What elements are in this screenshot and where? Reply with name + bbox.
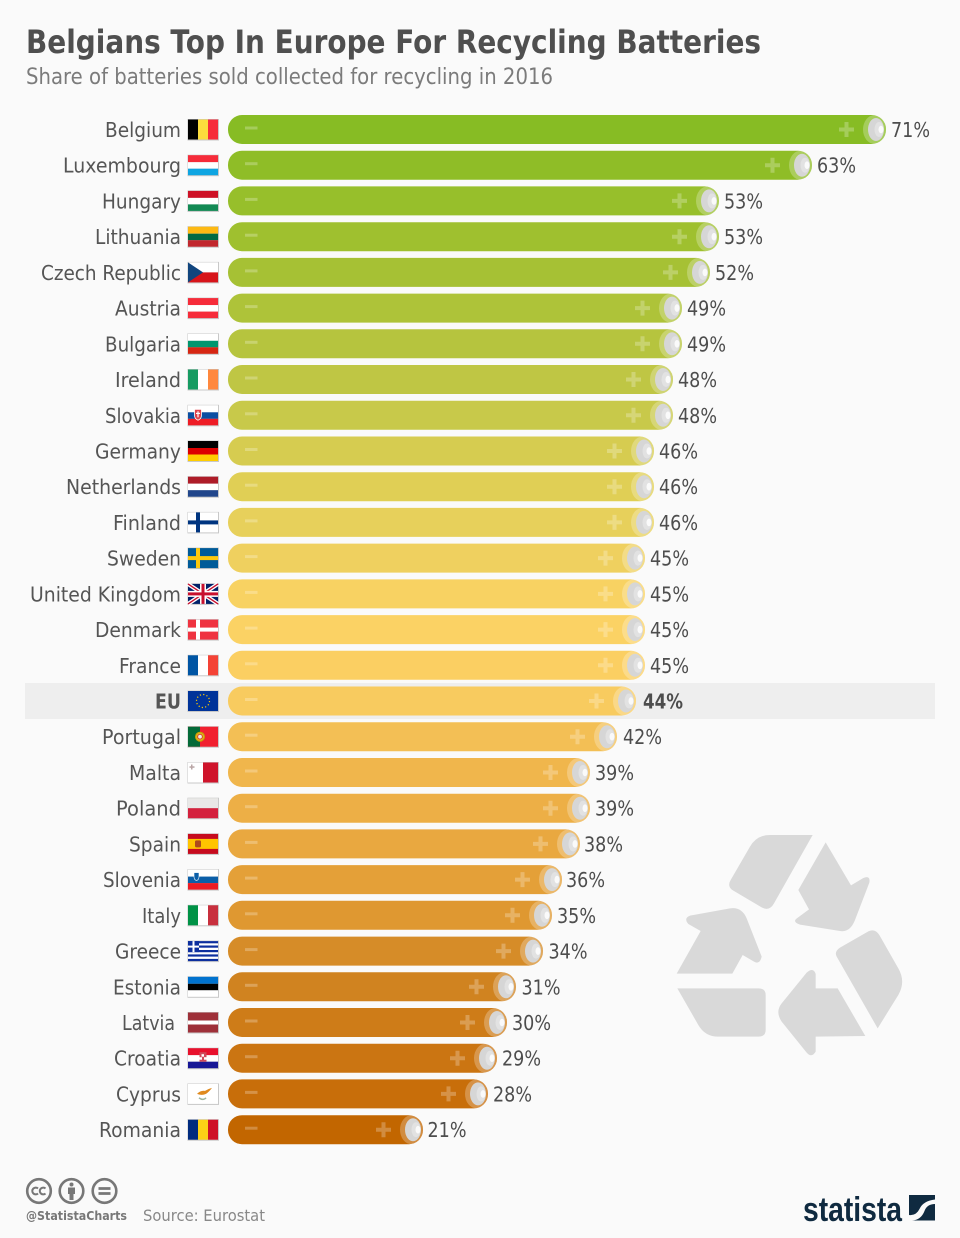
row: Ireland bbox=[115, 365, 717, 394]
flag: Belgium bbox=[188, 119, 219, 140]
row: Latvia: 30% bbox=[512, 1011, 551, 1035]
flag: Slovakia bbox=[188, 405, 219, 426]
statista wordmark: statista bbox=[803, 1191, 903, 1229]
subtitle: Share of batteries sold collected for recycling in 2016 bbox=[26, 65, 553, 90]
row: Croatia: 29% bbox=[502, 1047, 541, 1071]
row: Finland bbox=[113, 508, 698, 537]
flag: Germany bbox=[188, 440, 219, 462]
row: Netherlands bbox=[66, 472, 698, 501]
battery bar: Lithuania bbox=[228, 222, 719, 251]
row: Denmark: 45% bbox=[650, 618, 689, 642]
row: EU: 44% bbox=[643, 690, 683, 714]
row: Hungary: Hungary bbox=[102, 189, 181, 213]
row: Poland: Poland bbox=[116, 797, 181, 821]
row: Slovenia bbox=[103, 865, 605, 894]
battery bar: Netherlands bbox=[228, 472, 654, 501]
battery bar: United Kingdom bbox=[228, 579, 645, 608]
row: France bbox=[119, 651, 689, 680]
row: Romania: 21% bbox=[428, 1118, 466, 1142]
row: Malta: Malta bbox=[129, 761, 181, 785]
flag: Poland bbox=[188, 798, 219, 819]
row: Belgium bbox=[105, 115, 930, 144]
battery bar: Austria bbox=[228, 294, 682, 323]
row: Greece: Greece bbox=[115, 940, 181, 964]
row: Latvia: Latvia bbox=[122, 1011, 175, 1035]
row: Slovenia: 36% bbox=[566, 868, 605, 892]
flag: Czech Republic bbox=[188, 262, 219, 283]
row: Austria bbox=[115, 294, 726, 323]
row: Ireland: 48% bbox=[678, 368, 717, 392]
social handle: @StatistaCharts bbox=[26, 1208, 127, 1223]
row: Greece: 34% bbox=[548, 940, 588, 964]
flag: Latvia bbox=[188, 1012, 219, 1034]
flag: United Kingdom bbox=[188, 583, 219, 605]
battery bar: Greece bbox=[228, 937, 543, 966]
row: Slovakia: Slovakia bbox=[105, 404, 181, 428]
battery bar: Germany bbox=[228, 436, 654, 466]
row: Czech Republic: Czech Republic bbox=[41, 261, 181, 285]
row: Germany: 46% bbox=[659, 440, 698, 464]
battery bar: Malta bbox=[228, 758, 590, 787]
row: Hungary: 53% bbox=[724, 189, 763, 213]
row: Finland: Finland bbox=[113, 511, 181, 535]
battery bar: Italy bbox=[228, 901, 552, 930]
flag: Portugal bbox=[188, 726, 219, 748]
flag: Netherlands bbox=[188, 476, 219, 498]
battery bar: EU bbox=[228, 686, 636, 716]
row: EU: EU bbox=[155, 690, 181, 714]
flag: Sweden bbox=[188, 548, 219, 569]
row: Sweden bbox=[107, 544, 689, 573]
row: Estonia bbox=[113, 972, 560, 1001]
row: Netherlands: Netherlands bbox=[66, 475, 181, 499]
battery bar: Estonia bbox=[228, 972, 516, 1001]
row: Estonia: Estonia bbox=[113, 975, 181, 999]
row: Romania: Romania bbox=[99, 1118, 181, 1142]
row: Malta bbox=[129, 758, 634, 787]
row: Portugal: 42% bbox=[623, 725, 662, 749]
flag: Ireland bbox=[188, 369, 219, 390]
flag: Italy bbox=[188, 905, 219, 926]
title: Belgians Top In Europe For Recycling Batteries bbox=[26, 23, 761, 61]
battery bar: Spain bbox=[228, 829, 580, 858]
flag: Austria bbox=[188, 298, 219, 319]
row: Italy: 35% bbox=[557, 904, 596, 928]
flag: Romania bbox=[188, 1119, 219, 1141]
row: Ireland: Ireland bbox=[115, 368, 181, 392]
row: Poland bbox=[116, 794, 634, 823]
battery bar: Portugal bbox=[228, 722, 617, 751]
flag: France bbox=[188, 655, 219, 676]
battery bar: Hungary bbox=[228, 186, 719, 215]
row: Netherlands: 46% bbox=[659, 475, 698, 499]
battery bar: Poland bbox=[228, 794, 590, 823]
flag: Denmark bbox=[188, 619, 219, 641]
row: Portugal bbox=[102, 722, 662, 751]
row: Slovakia bbox=[105, 401, 717, 430]
row: Italy bbox=[142, 901, 596, 930]
battery bar: Finland bbox=[228, 508, 654, 537]
flag: Estonia bbox=[188, 976, 219, 998]
row: United Kingdom: 45% bbox=[650, 582, 689, 606]
icon: recycling symbol bbox=[677, 835, 902, 1055]
row: Lithuania: 53% bbox=[724, 225, 763, 249]
battery bar: Ireland bbox=[228, 365, 673, 394]
battery bar: Belgium bbox=[228, 115, 886, 144]
battery bar: Slovakia bbox=[228, 401, 673, 430]
row: Czech Republic: 52% bbox=[715, 261, 754, 285]
battery bar: Czech Republic bbox=[228, 258, 710, 287]
row: Cyprus bbox=[116, 1079, 532, 1108]
row: Lithuania bbox=[95, 222, 763, 251]
row: Austria: 49% bbox=[687, 297, 726, 321]
row: Croatia: Croatia bbox=[114, 1047, 181, 1071]
row: Bulgaria bbox=[105, 329, 726, 358]
row: Czech Republic bbox=[41, 258, 754, 287]
row: Spain: 38% bbox=[584, 832, 623, 856]
row: Lithuania: Lithuania bbox=[95, 225, 181, 249]
flag: Slovenia bbox=[188, 869, 219, 891]
battery bar: Denmark bbox=[228, 615, 645, 644]
row: Portugal: Portugal bbox=[102, 725, 181, 749]
flag: Finland bbox=[188, 512, 219, 533]
row: Romania bbox=[99, 1115, 466, 1144]
battery bar: Romania bbox=[228, 1115, 423, 1144]
row: Sweden: 45% bbox=[650, 547, 689, 571]
row: Sweden: Sweden bbox=[107, 547, 181, 571]
flag: Hungary bbox=[188, 190, 219, 212]
flag: Spain bbox=[188, 833, 219, 855]
row: Cyprus: Cyprus bbox=[116, 1082, 181, 1106]
row: United Kingdom: United Kingdom bbox=[30, 582, 181, 606]
row: Malta: 39% bbox=[595, 761, 634, 785]
row: France: France bbox=[119, 654, 181, 678]
flag: Luxembourg bbox=[188, 155, 219, 176]
row: Hungary bbox=[102, 186, 763, 215]
row: Latvia bbox=[122, 1008, 551, 1037]
row: Bulgaria: Bulgaria bbox=[105, 332, 181, 356]
row: Luxembourg bbox=[63, 151, 856, 180]
source: Source: Eurostat bbox=[143, 1206, 265, 1225]
row: Austria: Austria bbox=[115, 297, 181, 321]
flag: Cyprus bbox=[188, 1083, 219, 1105]
row: Denmark bbox=[95, 615, 689, 644]
row: Poland: 39% bbox=[595, 797, 634, 821]
row: EU bbox=[155, 686, 683, 716]
row: Luxembourg: Luxembourg bbox=[63, 154, 181, 178]
battery bar: France bbox=[228, 651, 645, 680]
flag: Malta bbox=[188, 762, 219, 784]
battery bar: Luxembourg bbox=[228, 151, 812, 180]
flag: EU bbox=[188, 690, 219, 712]
row: Estonia: 31% bbox=[522, 975, 560, 999]
row: Greece bbox=[115, 937, 588, 966]
row: France: 45% bbox=[650, 654, 689, 678]
flag: Lithuania bbox=[188, 226, 219, 248]
row: Belgium: 71% bbox=[891, 118, 930, 142]
row: Luxembourg: 63% bbox=[817, 154, 856, 178]
row: Spain bbox=[129, 829, 623, 858]
row: Bulgaria: 49% bbox=[687, 332, 726, 356]
row: Italy: Italy bbox=[142, 904, 181, 928]
row: Croatia bbox=[114, 1044, 541, 1073]
icon: creative commons licence badges bbox=[27, 1179, 116, 1203]
EU row highlight bbox=[25, 683, 935, 719]
battery bar: Latvia bbox=[228, 1008, 507, 1037]
battery bar: Slovenia bbox=[228, 865, 562, 894]
battery bar: Sweden bbox=[228, 544, 645, 573]
row: Spain: Spain bbox=[129, 832, 181, 856]
flag: Croatia bbox=[188, 1048, 219, 1069]
battery bar: Bulgaria bbox=[228, 329, 682, 358]
flag: Bulgaria bbox=[188, 333, 219, 355]
row: Slovakia: 48% bbox=[678, 404, 717, 428]
row: Germany: Germany bbox=[95, 440, 181, 464]
flag: Greece bbox=[188, 941, 219, 962]
row: Germany bbox=[95, 436, 698, 466]
row: Finland: 46% bbox=[659, 511, 698, 535]
battery bar: Cyprus bbox=[228, 1079, 488, 1108]
battery bar: Croatia bbox=[228, 1044, 497, 1073]
row: United Kingdom bbox=[30, 579, 689, 608]
row: Cyprus: 28% bbox=[493, 1082, 532, 1106]
row: Slovenia: Slovenia bbox=[103, 868, 181, 892]
icon: statista logo mark bbox=[909, 1195, 935, 1220]
row: Belgium: Belgium bbox=[105, 118, 181, 142]
row: Denmark: Denmark bbox=[95, 618, 181, 642]
